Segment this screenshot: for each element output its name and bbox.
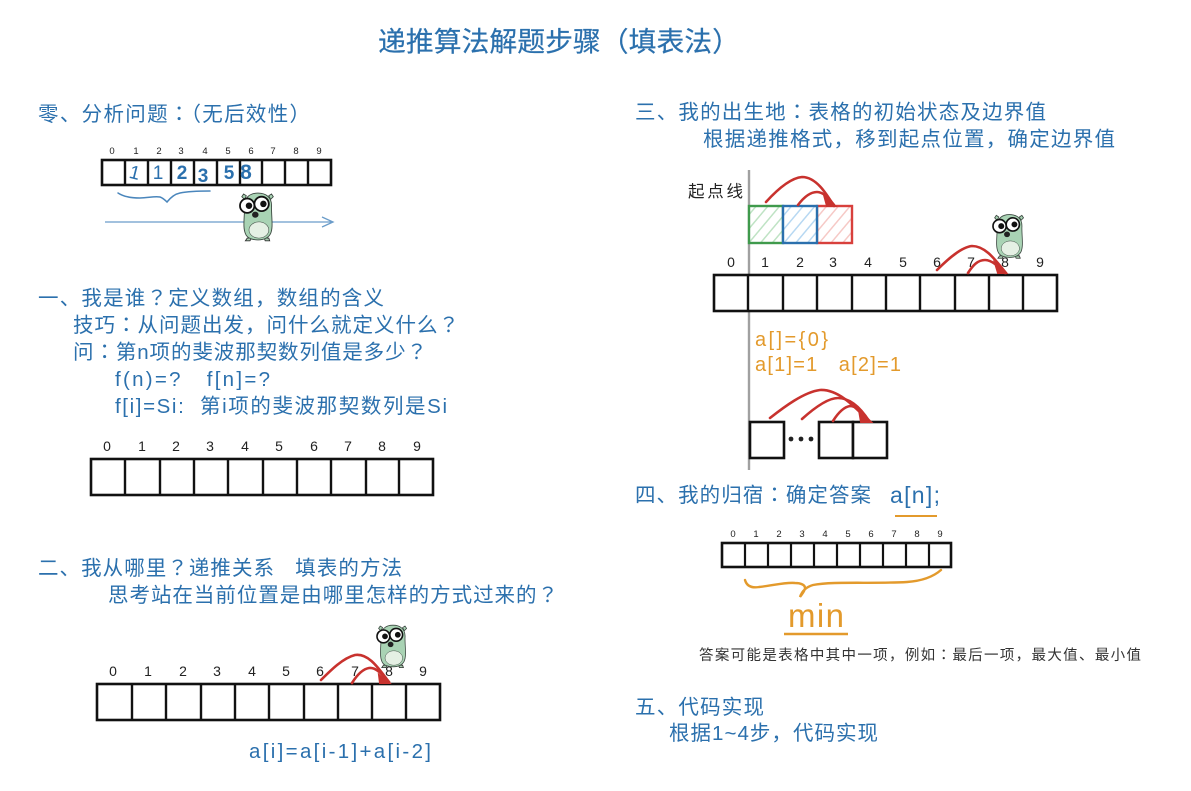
array: step two: 1	[144, 663, 152, 679]
array: step four	[722, 529, 951, 567]
array: step four: 2	[776, 529, 782, 540]
array: step one: 3	[206, 438, 214, 454]
array: step one: 2	[172, 438, 180, 454]
array: step three: 4	[864, 254, 872, 270]
icon: gopher above array	[993, 215, 1024, 258]
array: step three	[714, 254, 1057, 311]
brace under values	[118, 191, 210, 202]
array: step zero: 2	[156, 146, 162, 157]
boundary values: a[]={0}	[755, 329, 828, 351]
array: step three: 6	[933, 254, 941, 270]
array values: fibonacci digits: 5	[224, 163, 235, 184]
array: step two: 8	[385, 663, 393, 679]
array values: fibonacci digits: 2	[177, 163, 187, 184]
text block: step one: 问：第n项的斐波那契数列值是多少？	[73, 335, 427, 365]
text block: step one: f(n)=? f[n]=?	[115, 368, 270, 391]
title: 递推算法解题步骤（填表法）	[378, 26, 740, 57]
start line	[748, 170, 750, 470]
array: step zero: 3	[178, 146, 184, 157]
icon: gopher on line	[240, 193, 273, 241]
array: step two: 5	[282, 663, 290, 679]
boundary values: a[1]=1 a[2]=1	[755, 354, 901, 376]
array: step three: 1	[761, 254, 769, 270]
text block: step five: 五、代码实现	[635, 696, 764, 719]
heading: step zero: 零、分析问题：（无后效性）	[38, 97, 310, 127]
array: step four: 9	[937, 529, 943, 540]
array: step zero: 0	[109, 146, 115, 157]
text block: step three: 根据递推格式，移到起点位置，确定边界值	[703, 128, 1115, 151]
handwritten min: min	[788, 597, 844, 634]
orange brace	[745, 570, 941, 597]
array: step four: 4	[822, 529, 828, 540]
boundary values	[755, 329, 901, 376]
array: step three: 0	[727, 254, 735, 270]
array: step zero	[102, 146, 331, 185]
array values: fibonacci digits: 8	[240, 161, 252, 184]
text block: step two	[38, 551, 558, 608]
array: step one: 4	[241, 438, 249, 454]
text block: step one: f[i]=Si: 第i项的斐波那契数列是Si	[115, 395, 447, 418]
arrows: step three recurrence	[937, 246, 1006, 273]
array: step two: 6	[316, 663, 324, 679]
arrow: iteration direction	[105, 217, 333, 227]
arrows: step two recurrence	[321, 655, 389, 683]
text block: step two: 二、我从哪里？递推关系 填表的方法	[38, 551, 402, 581]
array: step one	[91, 438, 433, 495]
icon: gopher above cell 8	[377, 625, 407, 668]
array values: fibonacci digits	[127, 161, 252, 187]
array: step zero: 6	[248, 146, 254, 157]
array: step one: 7	[344, 438, 352, 454]
arrows: general recurrence	[770, 390, 871, 422]
array: step two: 2	[179, 663, 187, 679]
text block: step one: 一、我是谁？定义数组，数组的含义	[38, 281, 384, 311]
formula: a[i]=a[i-1]+a[i-2]	[249, 740, 431, 763]
array values: fibonacci digits: 1	[153, 163, 163, 184]
text block: step three: 三、我的出生地：表格的初始状态及边界值	[635, 95, 1046, 125]
array: step three: 7	[967, 254, 975, 270]
array values: fibonacci digits: 3	[198, 166, 208, 187]
text block: step one: 技巧：从问题出发，问什么就定义什么？	[73, 308, 459, 338]
array values: fibonacci digits: 1	[127, 162, 142, 185]
text block: step five: 根据1~4步，代码实现	[669, 722, 878, 745]
heading: step four: 四、我的归宿：确定答案	[635, 478, 871, 508]
array: step three: 2	[796, 254, 804, 270]
array: step zero: 1	[133, 146, 139, 157]
hatched boundary cells	[749, 206, 852, 243]
array: step zero: 9	[316, 146, 322, 157]
array: step one: 0	[103, 438, 111, 454]
cells with ellipsis	[750, 422, 887, 458]
text block: step two: 思考站在当前位置是由哪里怎样的方式过来的？	[108, 578, 558, 608]
array: step one: 8	[378, 438, 386, 454]
answer label: a[n];	[890, 482, 940, 508]
text block: step one	[38, 281, 459, 418]
text block: step five	[635, 696, 878, 745]
array: step four: 5	[845, 529, 851, 540]
array: step four: 8	[914, 529, 920, 540]
array: step zero: 4	[202, 146, 208, 157]
array: step four: 6	[868, 529, 874, 540]
array: step one: 9	[413, 438, 421, 454]
array: step two: 4	[248, 663, 256, 679]
array: step two: 7	[351, 663, 359, 679]
array: step zero: 8	[293, 146, 299, 157]
array: step four: 7	[891, 529, 897, 540]
array: step three: 9	[1036, 254, 1044, 270]
array: step two	[97, 663, 440, 720]
label: start line: 起点线	[688, 182, 743, 201]
array: step four: 3	[799, 529, 805, 540]
note: answer: 答案可能是表格中其中一项，例如：最后一项，最大值、最小值	[699, 644, 1141, 665]
text block: step three	[635, 95, 1115, 151]
arrows: boundary cells	[766, 177, 835, 206]
array: step four: 1	[753, 529, 759, 540]
array: step three: 5	[899, 254, 907, 270]
array: step one: 6	[310, 438, 318, 454]
array: step one: 1	[138, 438, 146, 454]
array: step one: 5	[275, 438, 283, 454]
array: step two: 3	[213, 663, 221, 679]
array: step two: 9	[419, 663, 427, 679]
array: step four: 0	[730, 529, 736, 540]
array: step three: 3	[829, 254, 837, 270]
array: step two: 0	[109, 663, 117, 679]
array: step three: 8	[1001, 254, 1009, 270]
array: step zero: 7	[270, 146, 276, 157]
array: step zero: 5	[225, 146, 231, 157]
